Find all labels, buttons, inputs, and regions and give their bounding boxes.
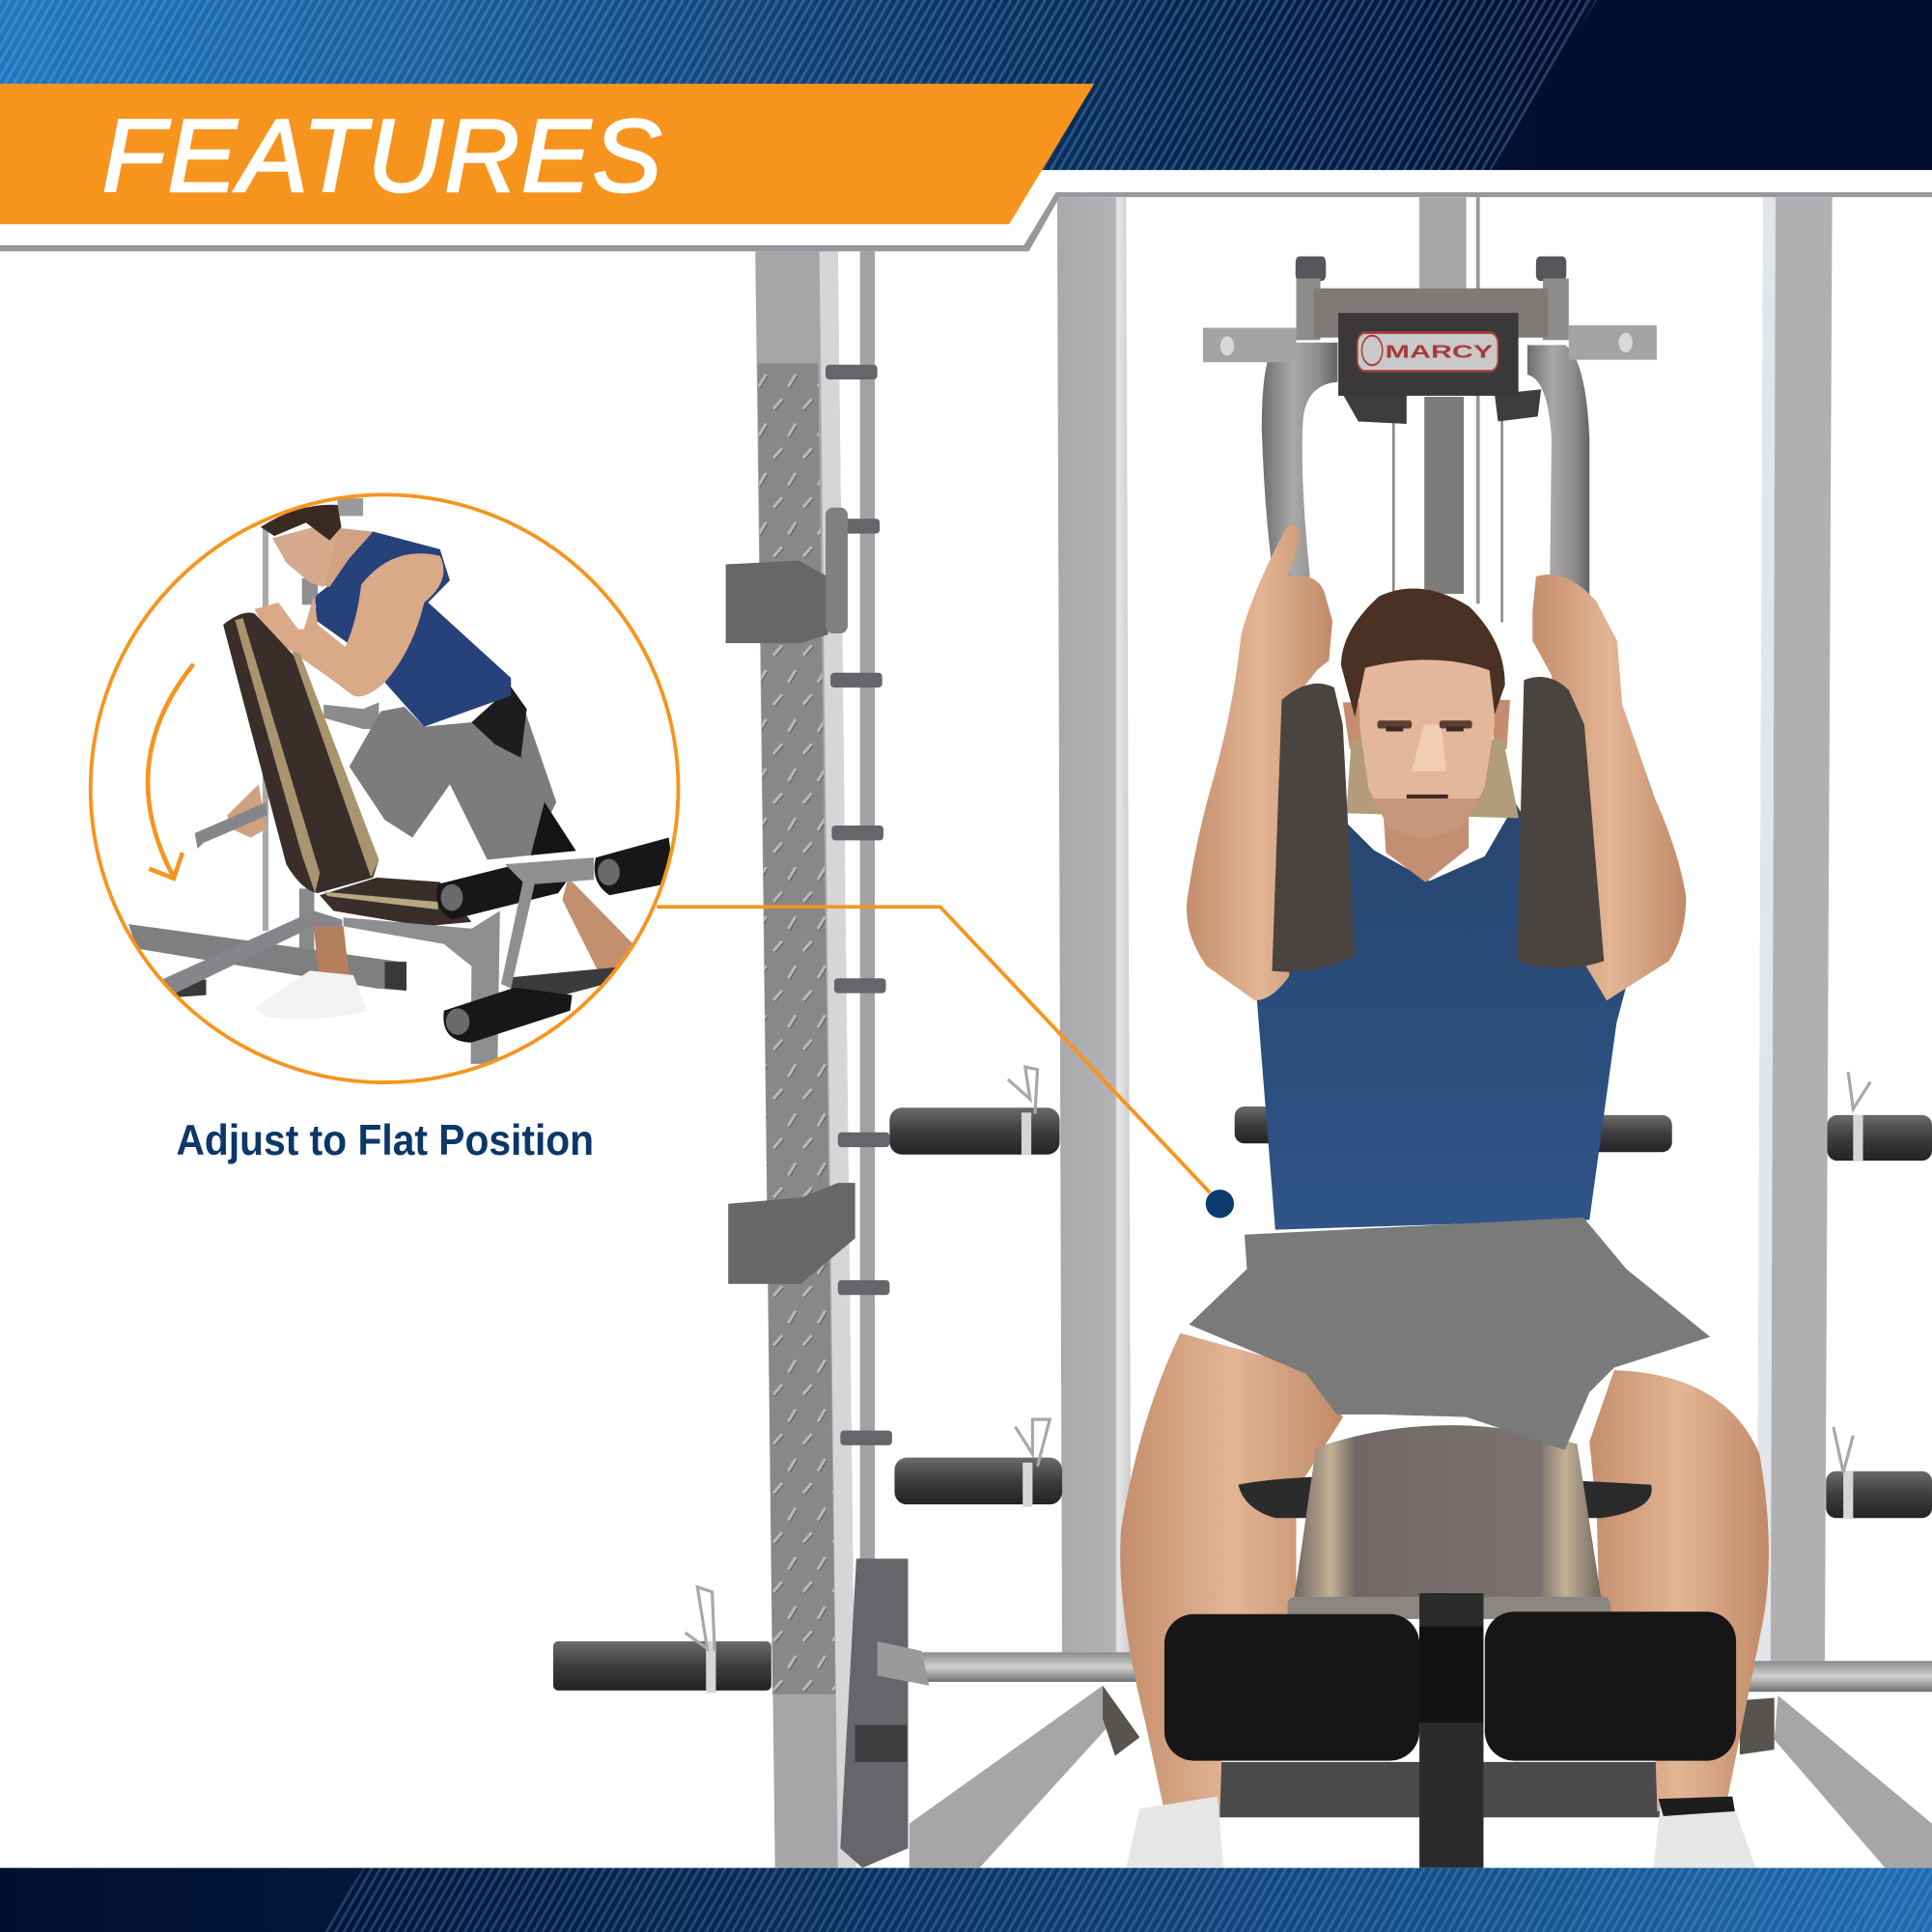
floor frame	[910, 1686, 1932, 1868]
weight pegs	[553, 1067, 1932, 1693]
head	[1341, 588, 1519, 882]
front leg	[562, 878, 633, 970]
callout dot	[1206, 1190, 1234, 1218]
logo plate: MARCY	[1386, 344, 1494, 362]
right upright	[1757, 197, 1833, 1661]
right arm pad	[1517, 677, 1604, 968]
arms, head and pads	[1187, 525, 1686, 1000]
inset circle: adjusting the bench	[91, 494, 679, 1082]
seat	[1239, 1425, 1652, 1619]
bench backrest	[223, 613, 378, 893]
back frame	[128, 498, 406, 997]
bench frame	[344, 910, 500, 1064]
legs	[1120, 1333, 1769, 1817]
bench seat	[320, 878, 471, 926]
inset ring	[91, 494, 679, 1082]
pulley housings	[1343, 389, 1541, 424]
orange title banner	[0, 84, 1094, 224]
white frame band and grey rule	[0, 192, 1932, 251]
middle upright	[1057, 197, 1132, 1657]
main photo: man on home gym	[553, 197, 1932, 1868]
lower j-hook	[728, 1183, 855, 1284]
leg roller pads and post	[1164, 1593, 1736, 1868]
logo plate	[1338, 313, 1519, 396]
tank top	[316, 532, 511, 727]
upper rollers and arm	[436, 838, 673, 989]
cross beam	[1313, 289, 1548, 338]
shoes	[1126, 1797, 1756, 1868]
shorts	[1189, 1218, 1710, 1450]
pivot cam arms	[1262, 343, 1589, 597]
rear leg and shoe	[255, 926, 367, 1019]
inset caption: Adjust to Flat Position	[176, 1117, 594, 1164]
left arm pad	[1272, 684, 1355, 972]
rotation arrow	[148, 664, 193, 879]
centre column	[1392, 197, 1503, 622]
upper j-hook	[726, 508, 848, 643]
arm	[255, 553, 443, 696]
lever handle and hand	[195, 784, 267, 849]
shorts	[350, 686, 576, 859]
torso shirt	[1257, 803, 1627, 1230]
left rack upright with diamond plate	[740, 251, 909, 1868]
callout leader line	[657, 907, 1210, 1192]
adjuster knobs	[1296, 256, 1569, 340]
upper pulley head and logo plate	[1203, 256, 1657, 597]
left arm and hand	[1187, 525, 1332, 1000]
barbell	[878, 1641, 1932, 1692]
side bars	[1203, 325, 1657, 362]
title: FEATURES	[102, 98, 661, 213]
footer band	[0, 1868, 1932, 1932]
lower bar and roller	[443, 967, 617, 1043]
header band	[0, 0, 1932, 170]
right arm and hand	[1532, 574, 1686, 1000]
head and neck	[261, 505, 373, 587]
